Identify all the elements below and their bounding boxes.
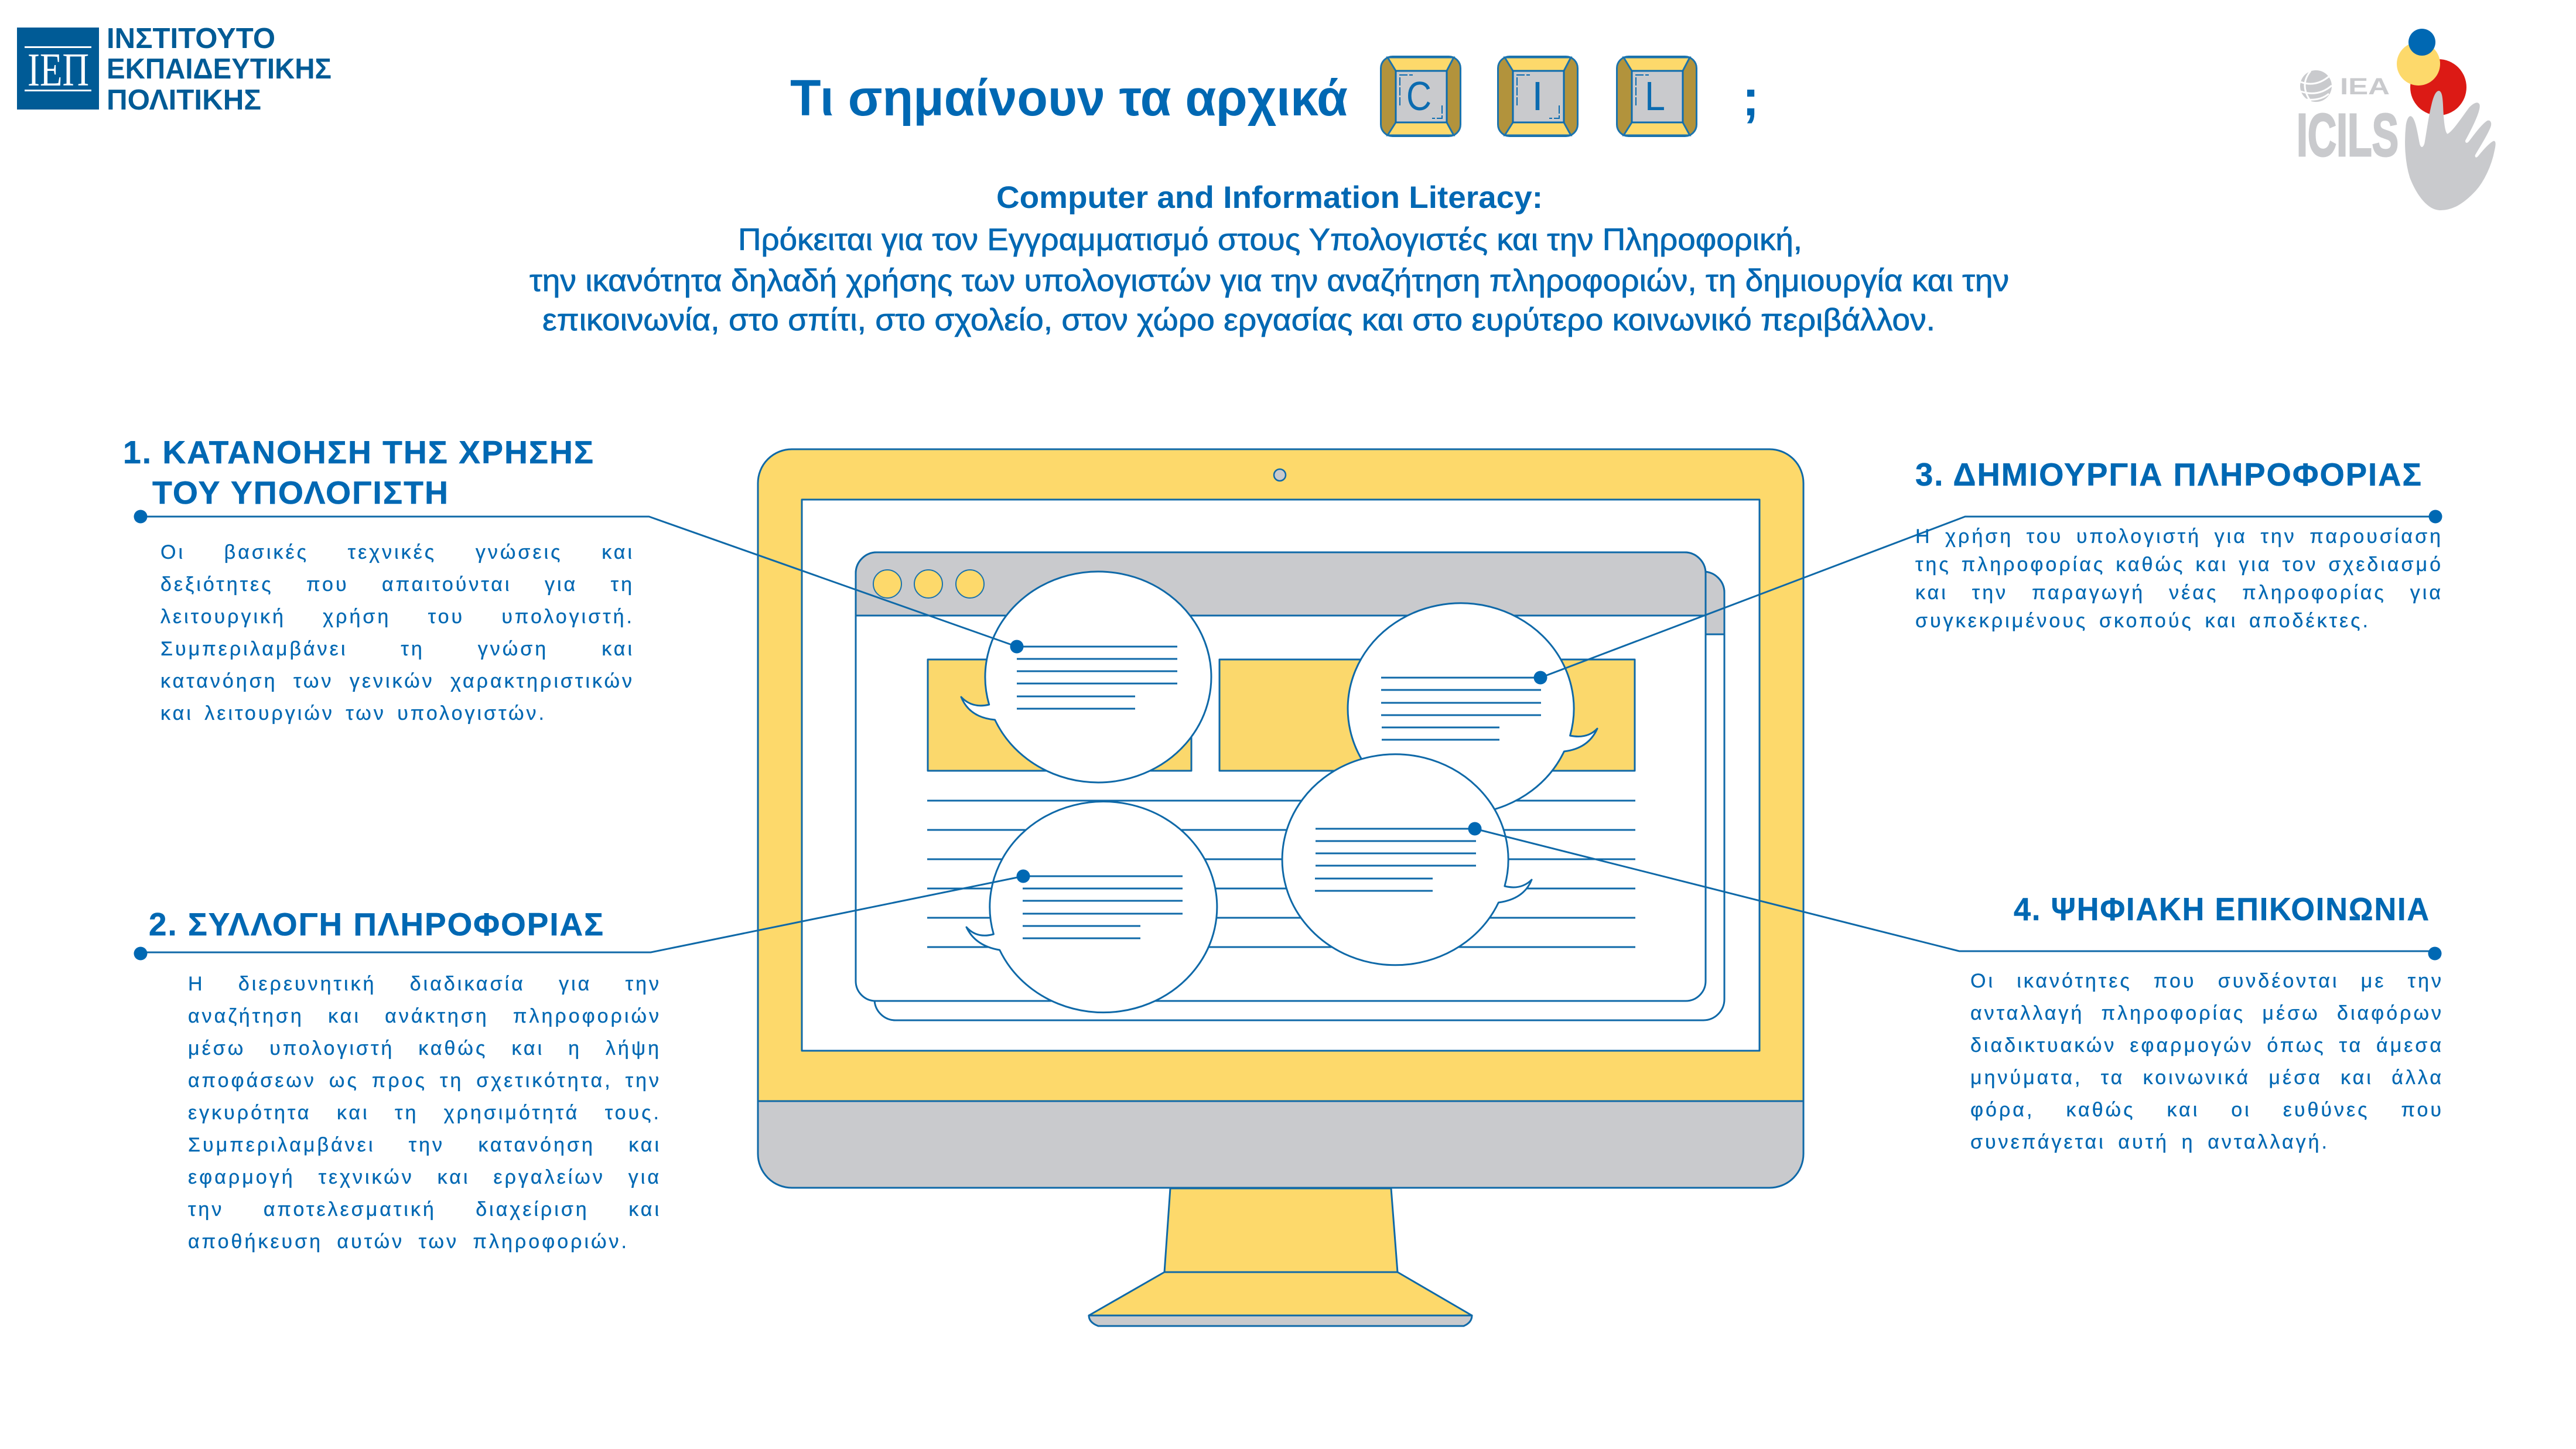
icon: hand (2406, 91, 2495, 210)
text block 2: Η διερευνητική διαδικασία για την (188, 973, 661, 995)
text block 2: την αποτελεσματική διαχείριση και (188, 1198, 661, 1221)
text block 4: Οι ικανότητες που συνδέονται με την (1970, 970, 2444, 992)
leader line 2 (134, 869, 1030, 961)
text block 3: Η χρήση του υπολογιστή για την παρουσίαση (1915, 525, 2443, 548)
speech bubble 4 (1282, 754, 1532, 965)
text block 1: λειτουργική χρήση του υπολογιστή. (160, 606, 634, 628)
intro heading: Computer and Information Literacy: (996, 180, 1543, 215)
leader line 4 (1468, 822, 2441, 961)
text block 1: κατανόηση των γενικών χαρακτηριστικών (160, 670, 634, 692)
text block 4: μηνύματα, τα κοινωνικά μέσα και άλλα (1970, 1067, 2444, 1089)
logo: IEA ICILS (2297, 29, 2495, 210)
text block 1: Συμπεριλαμβάνει τη γνώση και (160, 638, 634, 660)
leader line 3 (1533, 510, 2442, 684)
icon: IEA globe (2300, 70, 2332, 102)
logo: ΙΕΠ institute: ΙΕΠ (28, 45, 89, 96)
text block 3: της πληροφορίας καθώς και για τον σχεδιασμό (1915, 553, 2443, 576)
text block 1 (160, 541, 634, 724)
icon: key L: L (1645, 73, 1665, 119)
monitor body (758, 449, 1803, 1188)
title question mark: ; (1743, 70, 1759, 127)
icon: key C (1381, 56, 1461, 136)
text block 1: δεξιότητες που απαιτούνται για τη (160, 573, 634, 596)
logo: IEA ICILS: IEA (2340, 74, 2390, 100)
logo: ΙΕΠ institute: ΕΚΠΑΙΔΕΥΤΙΚΗΣ (107, 53, 332, 85)
text block 2: αποθήκευση αυτών των πληροφοριών. (188, 1231, 629, 1253)
text block 4 (1970, 970, 2444, 1153)
logo: ΙΕΠ institute: ΠΟΛΙΤΙΚΗΣ (107, 84, 261, 116)
heading 4: 4. ΨΗΦΙΑΚΗ ΕΠΙΚΟΙΝΩΝΙΑ (2014, 891, 2430, 927)
heading 1: 1. ΚΑΤΑΝΟΗΣΗ ΤΗΣ ΧΡΗΣΗΣ (123, 434, 595, 470)
heading 2: 2. ΣΥΛΛΟΓΗ ΠΛΗΡΟΦΟΡΙΑΣ (149, 906, 604, 942)
text block 4: ανταλλαγή πληροφορίας μέσω διαφόρων (1970, 1002, 2444, 1024)
icon: key I: I (1532, 73, 1543, 119)
logo: IEA ICILS: ICILS (2297, 101, 2399, 169)
text block 3: συγκεκριμένους σκοπούς και αποδέκτες. (1915, 610, 2370, 632)
text block 1: και λειτουργιών των υπολογιστών. (160, 702, 546, 724)
speech bubble 1 (961, 572, 1211, 782)
text block 2: αποφάσεων ως προς τη σχετικότητα, την (188, 1069, 661, 1092)
text block 2: μέσω υπολογιστή καθώς και η λήψη (188, 1037, 661, 1060)
intro text: επικοινωνία, στο σπίτι, στο σχολείο, στον χώρο εργασίας και στο ευρύτερο κοινωνικό περιβάλλον. (542, 303, 1935, 337)
intro text: την ικανότητα δηλαδή χρήσης των υπολογιστών για την αναζήτηση πληροφοριών, τη δημιουργία και την (529, 264, 2009, 298)
text block 2: Συμπεριλαμβάνει την κατανόηση και (188, 1134, 661, 1156)
back browser window (874, 572, 1724, 1020)
icon: key L (1617, 56, 1696, 136)
text block 4: φόρα, καθώς και οι ευθύνες που (1970, 1099, 2444, 1121)
text block 3 (1915, 525, 2443, 632)
front browser window (856, 552, 1706, 1001)
text block 2: εφαρμογή τεχνικών και εργαλείων για (188, 1166, 661, 1188)
intro text (529, 223, 2009, 337)
speech bubble 3 (1348, 603, 1597, 814)
heading 1 (123, 434, 595, 511)
icon: key I (1498, 56, 1578, 136)
text block 1: Οι βασικές τεχνικές γνώσεις και (160, 541, 634, 563)
heading 1: ΤΟΥ ΥΠΟΛΟΓΙΣΤΗ (152, 474, 449, 511)
logo: ΙΕΠ institute: ΙΝΣΤΙΤΟΥΤΟ (107, 23, 275, 54)
title: Τι σημαίνουν τα αρχικά (790, 70, 1348, 127)
text block 4: συνεπάγεται αυτή η ανταλλαγή. (1970, 1131, 2329, 1153)
text block 3: και την παραγωγή νέας πληροφορίας για (1915, 582, 2443, 604)
leader line 1 (134, 510, 1024, 654)
text block 4: διαδικτυακών εφαρμογών όπως τα άμεσα (1970, 1034, 2444, 1057)
speech bubble 2 (966, 802, 1217, 1013)
intro text: Πρόκειται για τον Εγγραμματισμό στους Υπολογιστές και την Πληροφορική, (738, 223, 1802, 257)
monitor stand (1089, 1188, 1472, 1326)
page content blocks (927, 659, 1635, 947)
text block 2: αναζήτηση και ανάκτηση πληροφοριών (188, 1005, 661, 1027)
text block 2: εγκυρότητα και τη χρησιμότητά τους. (188, 1102, 661, 1124)
icon: key C: C (1406, 73, 1432, 119)
heading 3: 3. ΔΗΜΙΟΥΡΓΙΑ ΠΛΗΡΟΦΟΡΙΑΣ (1915, 456, 2423, 493)
monitor screen (802, 500, 1760, 1051)
logo: ΙΕΠ institute (17, 23, 332, 116)
monitor illustration (758, 449, 1803, 1326)
text block 2 (188, 973, 661, 1253)
